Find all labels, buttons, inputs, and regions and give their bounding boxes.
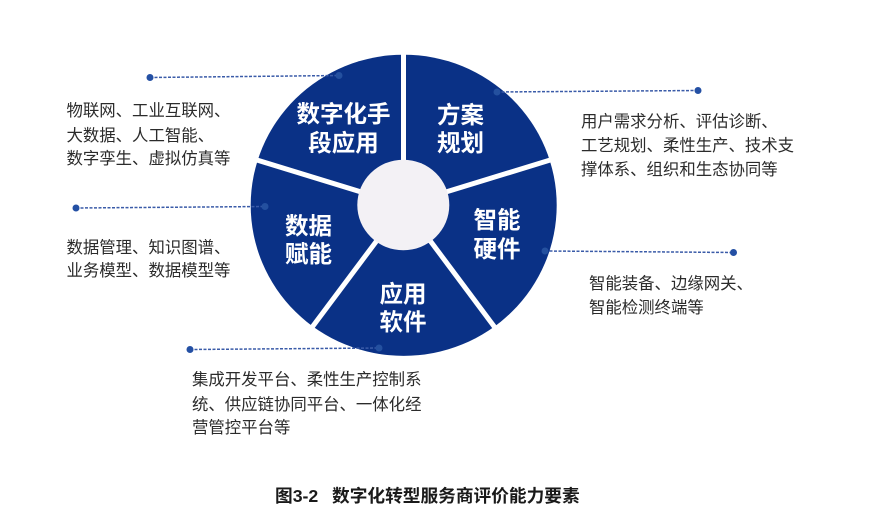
segment label: 智能硬件: 硬件	[474, 236, 520, 262]
text block: 数字化手段应用 details: 物联网、工业互联网、	[66, 102, 230, 120]
text block: 数字化手段应用 details: 大数据、人工智能、	[66, 127, 214, 145]
connector: 数据赋能	[72, 203, 268, 212]
segment label: 方案规划	[437, 101, 484, 156]
connector: 数字化手段应用	[146, 72, 342, 81]
connector: 应用软件	[186, 344, 382, 353]
text block: 智能硬件 details: 智能检测终端等	[589, 299, 704, 317]
text block: 智能硬件 details	[589, 275, 753, 317]
text block: 数字化手段应用 details: 数字孪生、虚拟仿真等	[66, 150, 230, 168]
text block: 应用软件 details	[192, 371, 421, 437]
connector: 方案规划	[494, 87, 702, 96]
segment label: 智能硬件: 智能	[474, 207, 520, 233]
text block: 方案规划 details: 工艺规划、柔性生产、技术支	[581, 137, 794, 155]
segment label: 方案规划: 规划	[437, 130, 484, 156]
text block: 智能硬件 details: 智能装备、边缘网关、	[589, 275, 753, 293]
figure title: 图3-2	[275, 486, 318, 506]
segment label: 方案规划: 方案	[437, 101, 484, 128]
text block: 数据赋能 details: 数据管理、知识图谱、	[66, 239, 230, 257]
segment label: 智能硬件	[474, 207, 520, 262]
text block: 数据赋能 details	[66, 239, 230, 280]
pie diagram	[247, 45, 560, 356]
text block: 方案规划 details: 用户需求分析、评估诊断、	[581, 113, 778, 131]
text block: 方案规划 details	[581, 113, 794, 179]
figure title: 数字化转型服务商评价能力要素	[332, 485, 580, 506]
segment label: 数据赋能: 数据	[285, 213, 332, 239]
segment label: 应用软件: 应用	[380, 281, 426, 307]
text block: 数字化手段应用 details	[66, 102, 230, 168]
text block: 应用软件 details: 统、供应链协同平台、一体化经	[192, 395, 421, 414]
segment label: 数据赋能	[285, 213, 332, 267]
segment label: 数据赋能: 赋能	[285, 241, 332, 267]
segment label: 数字化手段应用: 数字化手	[296, 101, 390, 127]
text block: 数据赋能 details: 业务模型、数据模型等	[66, 262, 230, 280]
text block: 方案规划 details: 撑体系、组织和生态协同等	[581, 161, 778, 179]
segment label: 数字化手段应用: 段应用	[308, 129, 379, 156]
segment label: 应用软件	[380, 281, 426, 335]
segment label: 应用软件: 软件	[380, 309, 426, 335]
connector: 智能硬件	[542, 248, 737, 256]
text block: 应用软件 details: 营管控平台等	[192, 419, 290, 437]
segment label: 数字化手段应用	[296, 101, 390, 156]
text block: 应用软件 details: 集成开发平台、柔性生产控制系	[192, 371, 421, 389]
